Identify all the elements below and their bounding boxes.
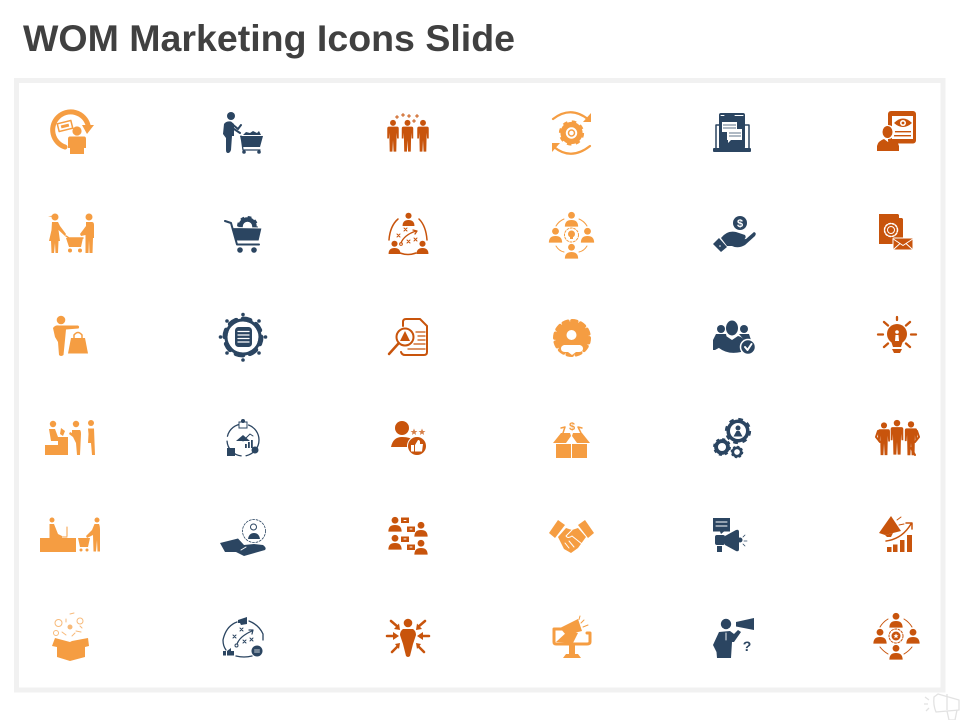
icon: open box with ideas <box>52 613 89 661</box>
icon: document under magnifier with warning <box>389 319 427 355</box>
icon: laptop with chat windows <box>713 113 751 152</box>
icon: business growth cycle <box>227 419 259 456</box>
icon: document in gear ring <box>219 313 267 362</box>
icon: three men celebrating <box>387 114 429 152</box>
icon: person pointing at shopping bag <box>53 316 88 356</box>
icon: person with money cycle <box>53 112 94 154</box>
icon: three men standing together <box>876 420 919 455</box>
icon: two people with shopping cart <box>48 214 94 253</box>
icon: person with incoming arrows <box>387 619 429 657</box>
icon: business team with check mark <box>713 320 756 354</box>
title: WOM Marketing Icons Slide <box>23 18 515 59</box>
icon: gears with person <box>714 420 750 458</box>
icon: megaphone hand on monitor <box>554 616 590 658</box>
icon: man with eye on tablet <box>877 111 916 151</box>
icon: handshake <box>549 520 594 553</box>
icon: man pushing shopping cart <box>223 112 263 154</box>
icon: person with rating and thumbs up <box>391 421 426 456</box>
icon: gear with cycle arrows <box>552 112 591 154</box>
icon: megaphone with speech bubble <box>713 518 747 552</box>
icon: people around star <box>873 613 920 660</box>
icon: hand holding person circle <box>220 520 266 556</box>
icon: open box with money: $ <box>569 421 575 433</box>
icon: people at reception counter <box>45 420 95 455</box>
icon: person profile badge <box>555 321 589 355</box>
icon: man with megaphone and question mark: ? <box>743 638 751 654</box>
icon: shopping cart with gear <box>225 217 262 253</box>
icon: open box with money <box>553 421 590 458</box>
icon: people exchanging messages <box>388 517 428 555</box>
icon: cashier desk and customer with cart <box>40 518 100 552</box>
icon: light bulb with person and rays <box>878 317 916 353</box>
icon: strategy circle with megaphone, thumb and chat <box>223 617 263 657</box>
icon: footer thumb megaphone outline <box>924 694 959 720</box>
icon: hand holding dollar coin <box>713 216 756 252</box>
icon: document with gear and mail <box>879 214 913 250</box>
icon: strategy circle with people <box>389 213 428 254</box>
icon: megaphone with growth chart <box>879 516 912 552</box>
icon: man with megaphone and question mark <box>713 618 754 658</box>
icon: people around idea <box>549 212 594 259</box>
icon: hand holding dollar coin: $ <box>737 218 743 230</box>
